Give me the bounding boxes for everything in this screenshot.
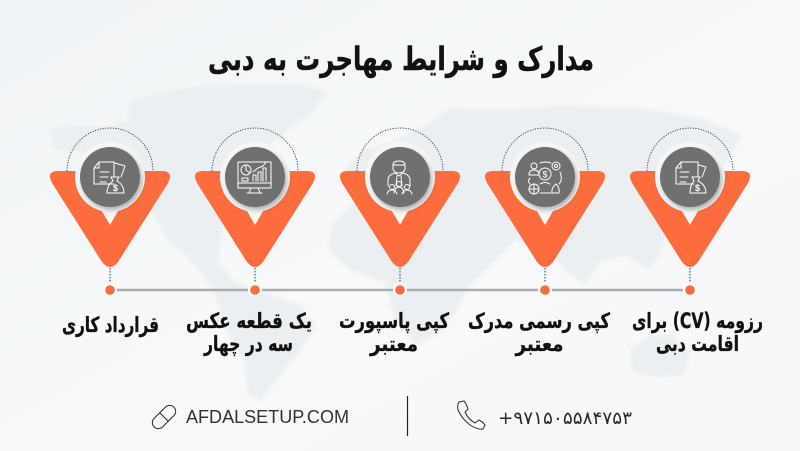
step 5: resume (630, 128, 763, 356)
icon: global network (528, 162, 561, 194)
stem and dot (103, 268, 117, 297)
label (186, 309, 312, 356)
timeline line (117, 289, 683, 291)
label: کپی رسمی مدرک (468, 309, 611, 333)
label (632, 309, 763, 356)
stem and dot (393, 268, 407, 297)
label: رزومه (CV) برای (632, 309, 763, 333)
step 2: photo (186, 128, 315, 356)
stem and dot (683, 268, 697, 297)
ring (655, 142, 725, 225)
label: اقامت دبی (656, 332, 739, 356)
icon: global network: $ (542, 170, 548, 180)
label: کپی پاسپورت (339, 309, 450, 333)
label: یک قطعه عکس (186, 309, 312, 333)
label: قرارداد کاری (62, 313, 159, 337)
icon: person with group (387, 161, 412, 194)
label: معتبر (369, 332, 418, 356)
world map backdrop (50, 84, 742, 400)
icon: link (150, 403, 178, 431)
label (468, 309, 611, 356)
ring (220, 142, 290, 225)
pin (50, 171, 170, 267)
circle (660, 147, 720, 207)
icon: contract and money bag: $ (113, 183, 118, 193)
icon: phone (458, 401, 485, 429)
icon: resume and money bag (676, 162, 706, 193)
circle (225, 147, 285, 207)
divider (406, 396, 408, 436)
title: مدارک و شرایط مهاجرت به دبی (208, 40, 594, 78)
step 4: degree (468, 128, 611, 356)
label (339, 309, 450, 356)
circle (370, 147, 430, 207)
icon: contract and money bag (94, 162, 125, 193)
website: AFDALSETUP.COM (186, 407, 349, 427)
stem and dot (248, 268, 262, 297)
ring (365, 142, 435, 225)
ring (75, 142, 145, 225)
pin (195, 171, 315, 267)
phone number: +۹۷۱۵۰۵۵۸۴۷۵۳ (498, 408, 632, 429)
icon: resume and money bag: $ (695, 183, 700, 193)
icon: monitor with charts (238, 162, 271, 193)
pin (340, 171, 460, 267)
stem and dot (538, 268, 552, 297)
circle (515, 147, 575, 207)
ring (510, 142, 580, 225)
label: معتبر (515, 332, 564, 356)
footer (150, 396, 632, 436)
label: سه در چهار (203, 332, 293, 356)
pin (630, 171, 750, 267)
circle (80, 147, 140, 207)
step 3: passport (339, 128, 460, 356)
pin (485, 171, 605, 267)
step 1: employment contract (50, 128, 170, 337)
